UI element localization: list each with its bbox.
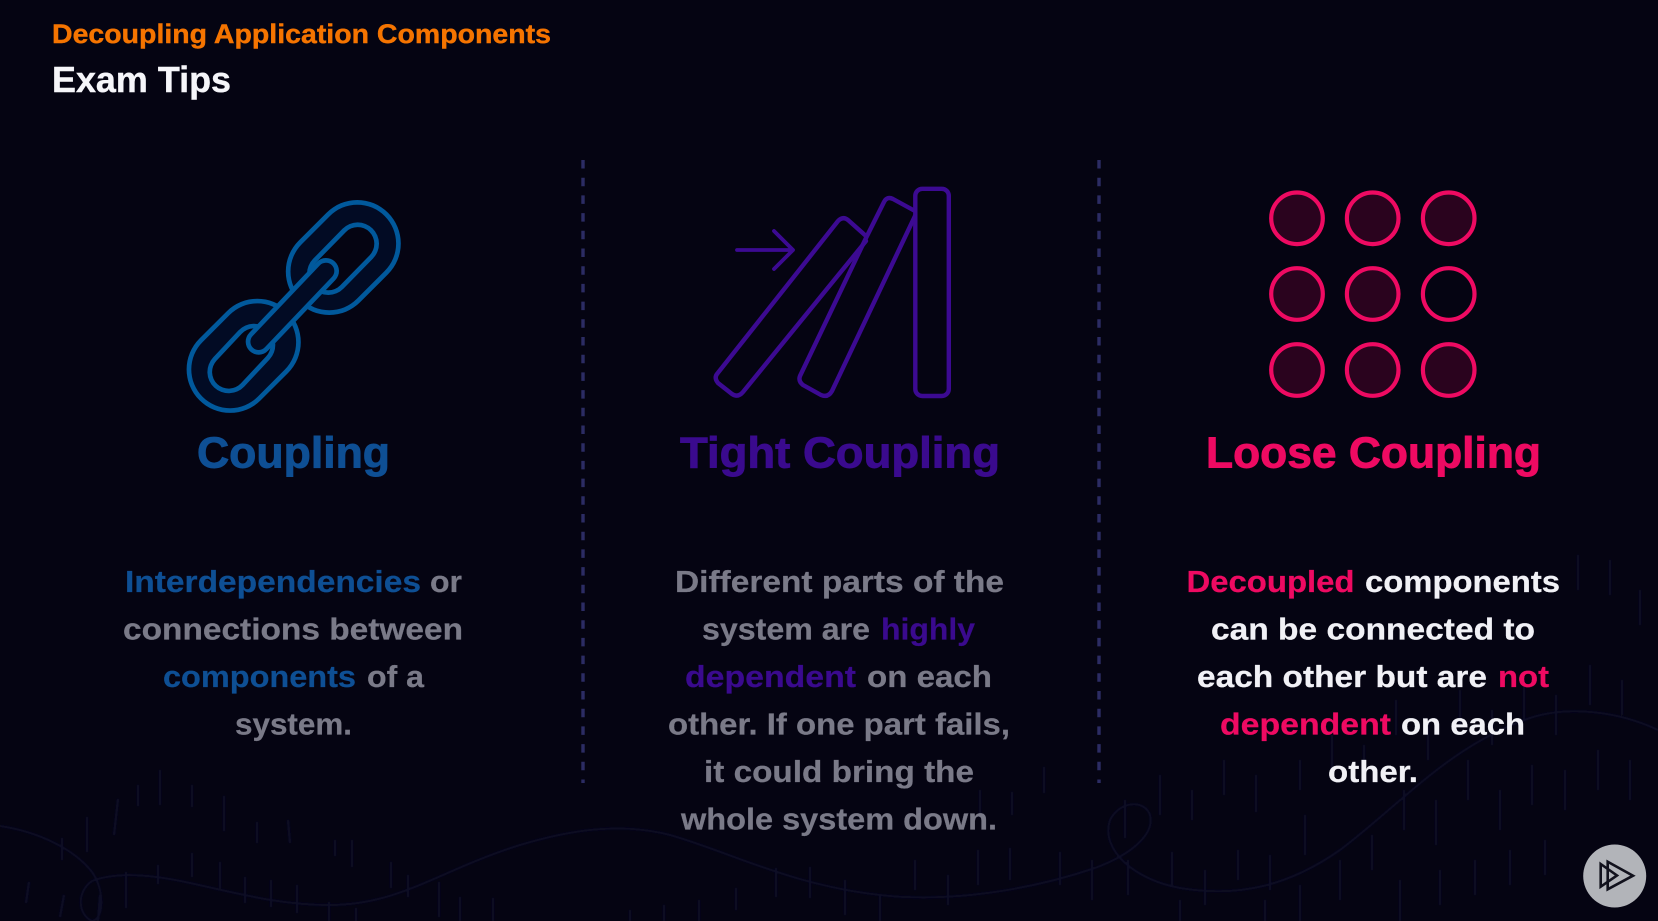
- text: tight coupling description: whole system down.: [680, 802, 997, 836]
- heading: coupling: Coupling: [197, 428, 390, 478]
- text: loose coupling description: can be connected to: [1211, 612, 1535, 646]
- text: tight coupling description: it could bring the: [704, 754, 974, 789]
- icon: grid of nine circles: [1271, 192, 1474, 396]
- text: tight coupling description: Different parts of the: [675, 564, 1004, 599]
- text: coupling description: [123, 564, 463, 742]
- icon: chain link: [229, 244, 358, 372]
- text: coupling description: components: [163, 659, 356, 694]
- icon: falling dominoes with arrow: [716, 189, 949, 396]
- text: coupling description: Interdependencies: [125, 564, 421, 599]
- text: coupling description: system.: [235, 706, 352, 742]
- heading: section title: Decoupling Application Components: [52, 19, 551, 49]
- text: loose coupling description: components: [1365, 564, 1560, 599]
- text: tight coupling description: dependent: [685, 659, 856, 694]
- text: tight coupling description: on each: [867, 659, 992, 694]
- text: loose coupling description: each other but are: [1197, 659, 1487, 694]
- text: coupling description: of a: [367, 659, 425, 694]
- heading: loose coupling: Loose Coupling: [1206, 428, 1541, 478]
- text: coupling description: connections between: [123, 612, 463, 646]
- heading: tight coupling: Tight Coupling: [680, 428, 1000, 478]
- text: coupling description: or: [430, 564, 462, 599]
- text: loose coupling description: on each: [1401, 706, 1525, 742]
- panel: loose coupling: [1186, 192, 1560, 789]
- panel: tight coupling: [668, 189, 1010, 837]
- text: loose coupling description: [1186, 564, 1560, 789]
- text: tight coupling description: [668, 564, 1010, 836]
- heading: exam tips: Exam Tips: [52, 59, 231, 100]
- text: tight coupling description: highly: [881, 612, 976, 646]
- text: loose coupling description: not: [1498, 659, 1549, 694]
- text: loose coupling description: dependent: [1220, 706, 1391, 742]
- text: tight coupling description: system are: [702, 612, 870, 646]
- text: loose coupling description: Decoupled: [1186, 564, 1354, 599]
- text: tight coupling description: other. If one part fails,: [668, 706, 1010, 742]
- text: loose coupling description: other.: [1328, 754, 1418, 789]
- panel: coupling: [123, 244, 463, 742]
- icon: play logo badge: [1583, 844, 1646, 908]
